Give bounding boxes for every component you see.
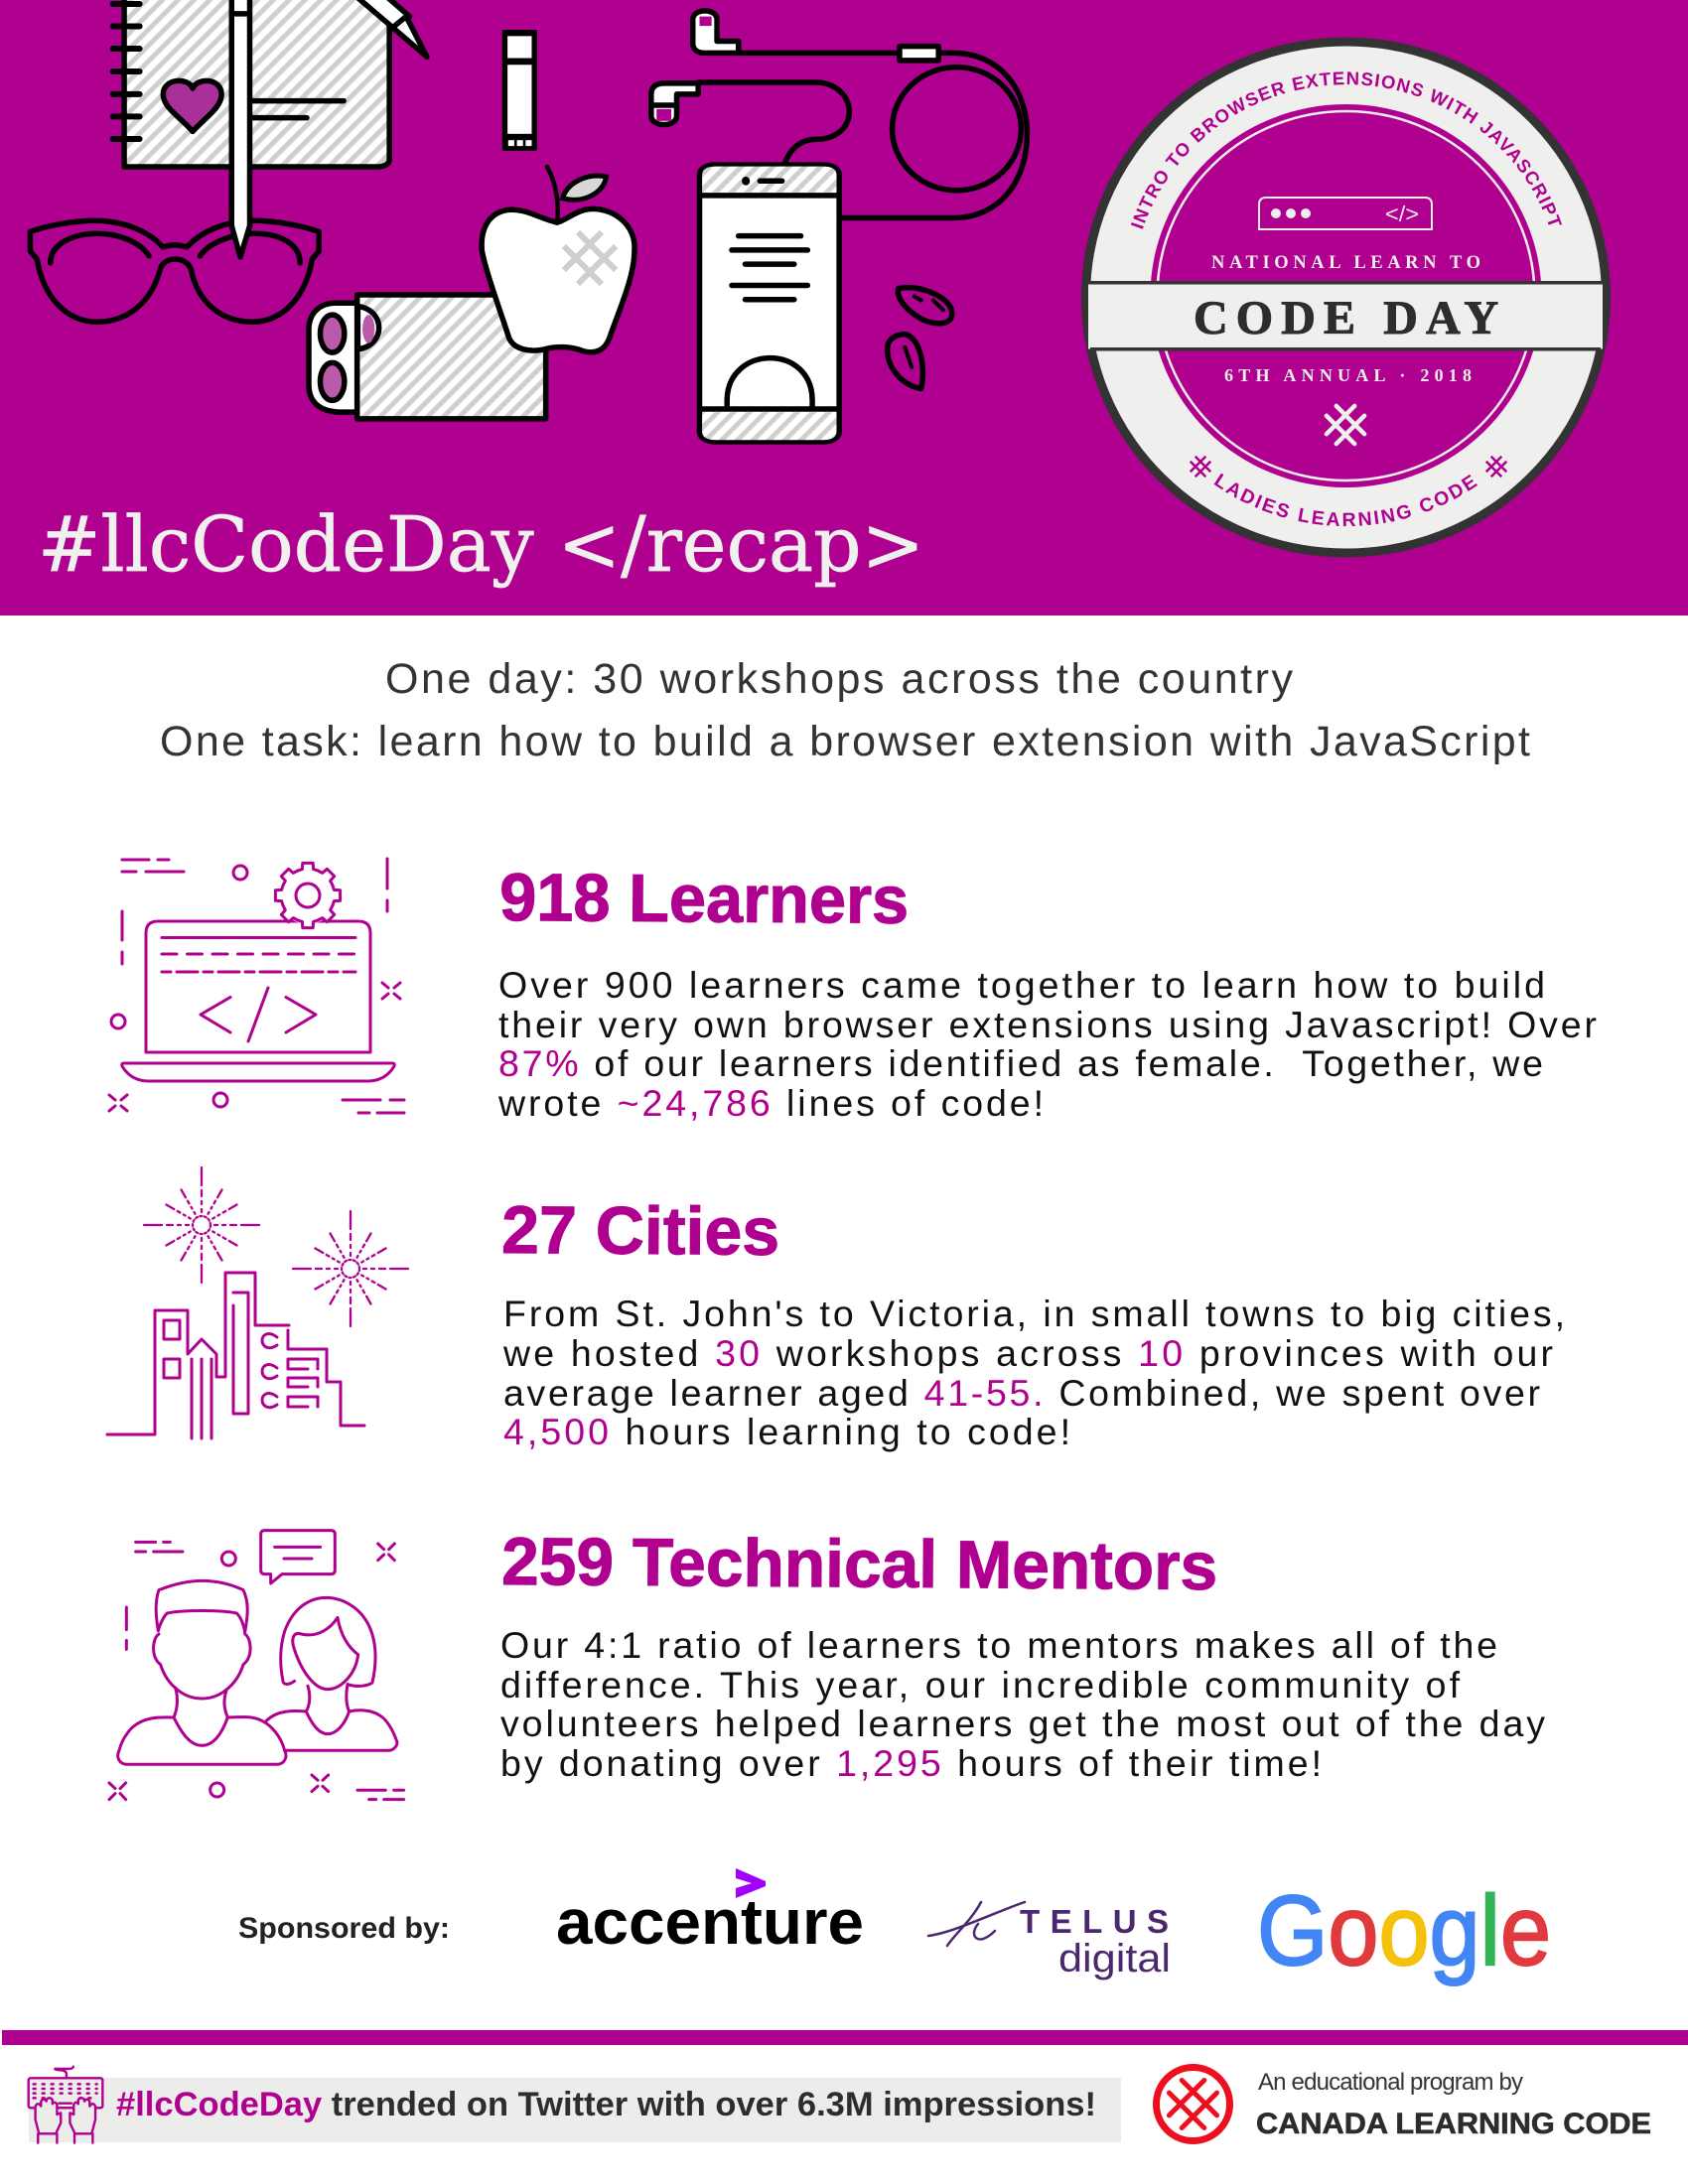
icon: grey apple lattice (552, 220, 628, 296)
icon: mentors (109, 1531, 404, 1800)
heading: 259 technical mentors: 259 Technical Mentors (501, 1524, 1217, 1604)
logo: canada learning code (1156, 2067, 1651, 2140)
header banner (0, 0, 1688, 615)
icon: earphone cable (651, 11, 1027, 217)
text block: mentors: by donating over 1,295 hours of their time! (500, 1742, 1322, 1784)
text block: learners (497, 964, 1597, 1124)
footer trending text: #llcCodeDay trended on Twitter with over 6.3M impressions! (116, 2086, 1096, 2123)
header illustration: desk objects (30, 0, 1027, 442)
badge browser bar (1259, 198, 1432, 229)
icon: striped folder with clip (309, 295, 546, 419)
logo: canada learning code: CANADA LEARNING CODE (1256, 2108, 1651, 2140)
badge browser bar: </> (1385, 202, 1419, 226)
title: #llcCodeDay </recap> (38, 501, 924, 590)
icon: city with fireworks (107, 1167, 408, 1438)
text block: mentors: difference. This year, our incredible community of (500, 1664, 1461, 1706)
text block: mentors: volunteers helped learners get the most out of the day (500, 1703, 1545, 1744)
icon: apple (482, 167, 634, 352)
text block: cities: 4,500 hours learning to code! (503, 1411, 1070, 1452)
icon: glue stick (502, 30, 537, 151)
badge ribbon: CODE DAY (1194, 292, 1498, 344)
text block: cities: From St. John's to Victoria, in small towns to big cities, (503, 1293, 1565, 1334)
subtitle: One task: learn how to build a browser extension with JavaScript (160, 718, 1530, 765)
subtitle: One day: 30 workshops across the country (385, 655, 1293, 703)
badge line: 6th annual: 6TH ANNUAL · 2018 (1224, 365, 1472, 385)
footer divider (2, 2030, 1688, 2045)
logo: google: Google (1257, 1875, 1551, 1986)
heading: 27 cities: 27 Cities (501, 1192, 779, 1270)
text block: mentors: Our 4:1 ratio of learners to mentors makes all of the (500, 1624, 1497, 1666)
badge top curved text: INTRO TO BROWSER EXTENSIONS WITH JAVASCRIPT (1130, 71, 1562, 229)
icon: notebook (113, 0, 389, 167)
icon: phone (699, 165, 839, 442)
text block: cities (502, 1293, 1565, 1452)
text block: cities: average learner aged 41-55. Combined, we spent over (503, 1372, 1540, 1414)
text block: learners: 87% of our learners identified as female. Together, we (498, 1042, 1543, 1084)
logo: telus digital: digital (1058, 1937, 1171, 1980)
icon: angled pen (355, 0, 427, 57)
icon: keyboard with hands (29, 2067, 102, 2143)
text block: learners: their very own browser extensions using Javascript! Over (498, 1004, 1597, 1045)
badge hash marks (1185, 451, 1512, 482)
logo: telus digital: TELUS (1020, 1903, 1169, 1940)
logo: accenture: accenture (556, 1886, 864, 1958)
text block: mentors (500, 1624, 1545, 1784)
text block: learners: Over 900 learners came together to learn how to build (498, 964, 1545, 1006)
text block: cities: we hosted 30 workshops across 10 provinces with our (502, 1332, 1553, 1374)
text block: learners: wrote ~24,786 lines of code! (497, 1082, 1044, 1124)
icon: glasses (30, 220, 319, 322)
icon: vertical pencil (231, 0, 250, 257)
logo: canada learning code: An educational program by (1258, 2069, 1523, 2096)
badge bottom curved text: LADIES LEARNING CODE (1213, 473, 1477, 526)
icon: laptop with code (109, 859, 404, 1113)
sponsored by label: Sponsored by: (238, 1912, 450, 1945)
badge lattice (1318, 397, 1373, 453)
heading: 918 learners: 918 Learners (499, 860, 909, 938)
badge: national learn to code day (1081, 38, 1611, 558)
icon: seeds (888, 288, 952, 388)
badge ribbon (1088, 281, 1603, 351)
footer trending bar (29, 2078, 1121, 2142)
subtitle (160, 655, 1530, 765)
badge line: national learn to: NATIONAL LEARN TO (1211, 253, 1480, 273)
logo: telus digital (928, 1902, 1171, 1980)
